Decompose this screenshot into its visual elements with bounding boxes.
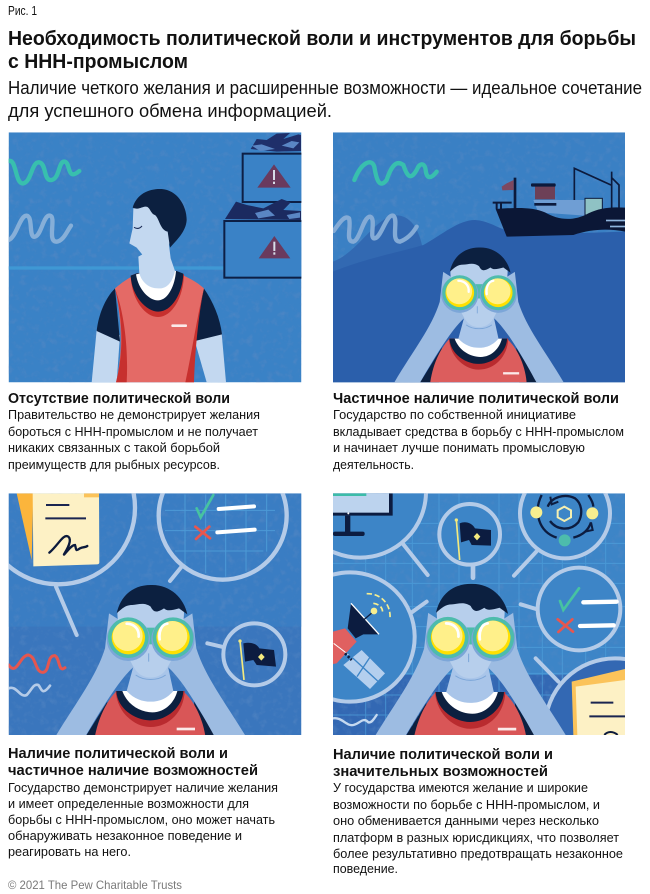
text block: political will and significant capacity: У государства имеются желание и широкие bbox=[333, 780, 588, 795]
text block: political will and partial capacity: и имеет определенные возможности для bbox=[8, 796, 249, 811]
text block: no political will: бороться с ННН-промыслом и не получает bbox=[8, 424, 258, 439]
icon: magnifier with satellite bbox=[285, 572, 427, 702]
person with binoculars bbox=[394, 247, 564, 382]
icon: fishing vessel bbox=[493, 168, 625, 237]
icon: upper crate with fish bbox=[243, 133, 303, 202]
icon: magnifier with flag bbox=[207, 623, 285, 685]
text block: political will and significant capacity: возможности по борьбе с ННН-промыслом, и bbox=[333, 797, 600, 812]
text block: partial political will: деятельность. bbox=[333, 457, 414, 472]
figure label: Рис. 1 bbox=[8, 4, 37, 18]
icon: red wave bbox=[9, 655, 65, 672]
text block: no political will bbox=[8, 391, 260, 472]
icon: pale wave bbox=[9, 216, 71, 242]
person with binoculars bbox=[370, 584, 571, 744]
icon: magnifier with cycle bbox=[514, 468, 610, 576]
text block: no political will: преимуществ для рыбных ресурсов. bbox=[8, 457, 220, 472]
panel: no political will illustration bbox=[8, 132, 302, 382]
person with binoculars bbox=[52, 585, 249, 742]
text block: political will and partial capacity: борьбы с ННН-промыслом, оно может начать bbox=[8, 812, 275, 827]
icon: magnifier with document bbox=[536, 658, 650, 798]
person with eyes closed bbox=[92, 189, 226, 382]
text block: partial political will bbox=[333, 391, 624, 472]
back wave bbox=[333, 215, 423, 292]
subtitle: для успешного обмена информацией. bbox=[8, 101, 332, 121]
text block: political will and partial capacity: Государство демонстрирует наличие желания bbox=[8, 780, 278, 795]
icon: magnifier with checklist bbox=[521, 568, 620, 650]
text block: partial political will: Государство по собственной инициативе bbox=[333, 407, 576, 422]
icon: teal wave bbox=[9, 161, 79, 183]
icon: lower crate with fish bbox=[224, 199, 304, 278]
text block: political will and partial capacity: обнаруживать незаконное поведение и bbox=[8, 828, 242, 843]
panel: partial political will illustration bbox=[333, 132, 625, 382]
text block: political will and partial capacity: частичное наличие возможностей bbox=[8, 763, 258, 779]
sea bbox=[333, 220, 625, 382]
icon: magnifier with flag bbox=[439, 504, 500, 578]
text block: political will and partial capacity: Наличие политической воли и bbox=[8, 746, 228, 762]
text block: no political will: никаких связанных с такой борьбой bbox=[8, 440, 220, 455]
text block: political will and significant capacity: более результативно предотвращать незаконное bbox=[333, 846, 623, 861]
text block: political will and significant capacity: оно обменивается данными через несколько bbox=[333, 813, 599, 828]
text block: political will and partial capacity bbox=[8, 746, 278, 859]
icon: magnifier with checklist bbox=[159, 452, 287, 581]
title: Необходимость политической воли и инструментов для борьбы bbox=[8, 28, 636, 50]
text block: political will and significant capacity: значительных возможностей bbox=[333, 764, 548, 780]
title bbox=[8, 28, 636, 73]
icon: pale wave bbox=[9, 685, 50, 696]
panel: political will and partial capacity illustration bbox=[8, 493, 302, 735]
text block: partial political will: Частичное наличие политической воли bbox=[333, 391, 619, 407]
title: с ННН-промыслом bbox=[8, 51, 188, 73]
panel: political will and significant capacity illustration bbox=[333, 493, 625, 735]
text block: political will and significant capacity bbox=[333, 747, 623, 876]
icon: pale wave bbox=[334, 215, 417, 242]
text block: political will and significant capacity: платформ в разных юрисдикциях, что позволяет bbox=[333, 830, 619, 845]
icon: pale wave bbox=[333, 715, 377, 725]
text block: political will and partial capacity: реагировать на него. bbox=[8, 844, 131, 859]
text block: partial political will: вкладывает средства в борьбу с ННН-промыслом bbox=[333, 424, 624, 439]
icon: magnifier with signed document bbox=[0, 431, 135, 635]
grid lines bbox=[333, 493, 625, 735]
text block: no political will: Отсутствие политической воли bbox=[8, 391, 230, 407]
text block: partial political will: и начинает лучше понимать промысловую bbox=[333, 440, 585, 455]
subtitle bbox=[8, 78, 642, 121]
icon: magnifier with monitor bbox=[294, 426, 428, 575]
text block: no political will: Правительство не демонстрирует желания bbox=[8, 407, 260, 422]
icon: teal wave bbox=[354, 162, 437, 184]
footer credit: © 2021 The Pew Charitable Trusts bbox=[8, 878, 182, 892]
text block: political will and significant capacity: Наличие политической воли и bbox=[333, 747, 553, 763]
text block: political will and significant capacity: поведение. bbox=[333, 861, 398, 876]
